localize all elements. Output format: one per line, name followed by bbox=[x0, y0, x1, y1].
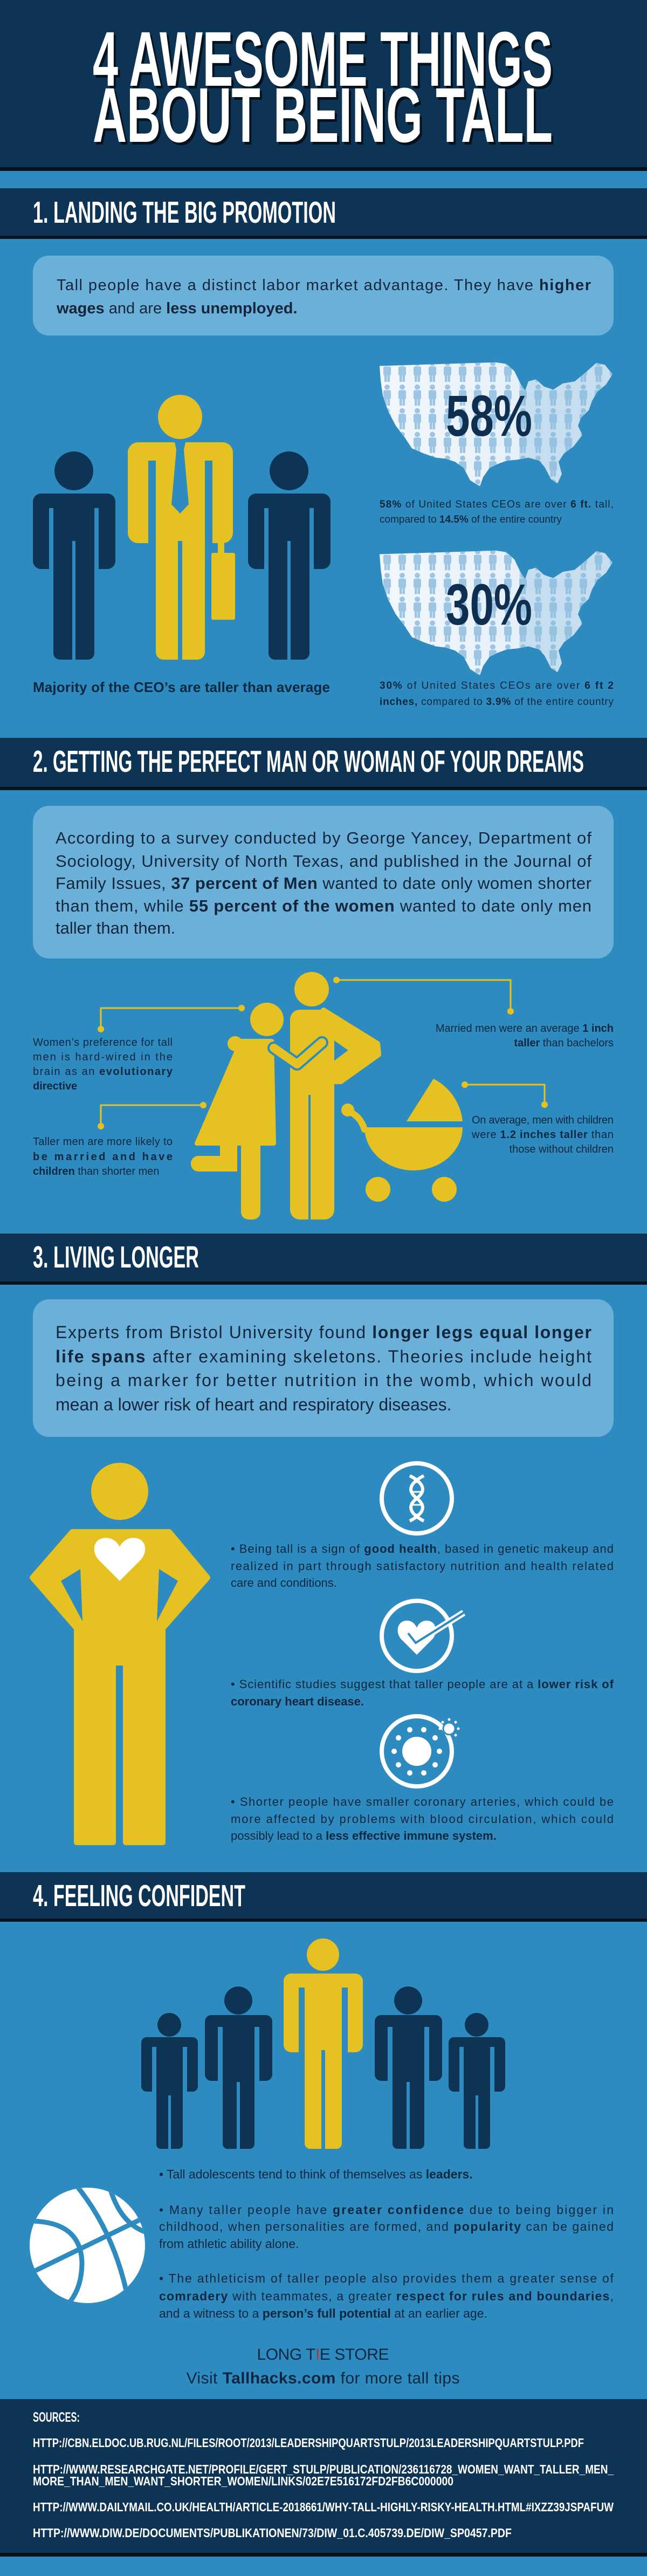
icon: basketball bbox=[30, 2184, 148, 2308]
bullet: leaders: • Tall adolescents tend to think of themselves as leaders. bbox=[159, 2167, 473, 2181]
note: women's preference: Women’s preference for tall bbox=[33, 1037, 173, 1049]
brand: Long Tie Store bbox=[187, 2346, 459, 2387]
section 1 header bbox=[0, 188, 647, 239]
note: men with children: On average, men with children bbox=[472, 1114, 614, 1126]
callout: labor market: Tall people have a distinct labor market advantage. They have higher bbox=[57, 277, 591, 294]
note: taller men married: Taller men are more likely to bbox=[33, 1136, 173, 1148]
bullet: good health bbox=[231, 1542, 614, 1590]
callout: Bristol bbox=[33, 1299, 614, 1437]
section 4 header bbox=[0, 1872, 647, 1922]
map: 58%: 58% bbox=[446, 383, 532, 448]
note: taller men married bbox=[33, 1136, 173, 1177]
note: women's preference: brain as an evolutionary bbox=[33, 1066, 173, 1078]
note: men with children bbox=[471, 1114, 614, 1155]
note: men with children: were 1.2 inches taller than bbox=[471, 1129, 614, 1141]
bullet: good health: care and conditions. bbox=[231, 1576, 337, 1590]
bullet: coronary: • Scientific studies suggest that taller people are at a lower risk of bbox=[231, 1677, 614, 1691]
sources: SOURCES: bbox=[33, 2410, 80, 2425]
bullet: good health: • Being tall is a sign of good health, based in genetic makeup and bbox=[231, 1542, 614, 1556]
brand: Long Tie Store: Visit Tallhacks.com for more tall tips bbox=[187, 2369, 459, 2387]
note: women's preference bbox=[33, 1037, 173, 1092]
section 2 header bbox=[0, 738, 647, 790]
icon: DNA bbox=[382, 1463, 452, 1533]
note: married men 1 inch: taller than bachelors bbox=[514, 1037, 614, 1049]
bullet: immune system: • Shorter people have smaller coronary arteries, which could be bbox=[231, 1795, 614, 1808]
figure 5 bbox=[449, 2013, 505, 2149]
figure 3: yellow tallest bbox=[284, 1938, 363, 2149]
section 4 header: 4. FEELING CONFIDENT bbox=[33, 1879, 245, 1913]
bullet: immune system: more affected by problems with blood circulation, which could bbox=[231, 1812, 614, 1826]
CEO figures bbox=[33, 395, 331, 660]
map: 30% bbox=[380, 551, 612, 675]
figure 4 bbox=[375, 1986, 442, 2149]
bullet: coronary bbox=[231, 1677, 614, 1708]
callout: survey: According to a survey conducted by George Yancey, Department of bbox=[56, 828, 591, 847]
map: 58% bbox=[380, 362, 612, 487]
figure: healthy person with heart bbox=[32, 1463, 208, 1842]
title band bbox=[0, 0, 647, 171]
callout: Bristol: Experts from Bristol University found longer legs equal longer bbox=[56, 1323, 591, 1342]
callout: labor market bbox=[33, 256, 614, 335]
paragraph: confidence: • Many taller people have greater confidence due to being bigger in bbox=[159, 2203, 614, 2217]
sources bbox=[0, 2399, 647, 2557]
callout: labor market: wages and are less unemployed. bbox=[56, 300, 298, 317]
section 1 header: 1. LANDING THE BIG PROMOTION bbox=[33, 195, 336, 230]
figure: left man bbox=[33, 451, 115, 660]
note: married men 1 inch: Married men were an average 1 inch bbox=[436, 1023, 614, 1034]
paragraph: confidence bbox=[159, 2203, 614, 2251]
stroller bbox=[341, 1079, 463, 1202]
paragraph: athleticism: comradery with teammates, a greater respect for rules and boundaries, bbox=[159, 2289, 614, 2303]
caption: 58%: compared to 14.5% of the entire country bbox=[380, 514, 562, 525]
caption: 30%: inches, compared to 3.9% of the entire country bbox=[380, 696, 614, 708]
callout: Bristol: mean a lower risk of heart and respiratory diseases. bbox=[56, 1395, 452, 1414]
bullet: good health: realized in part through satisfactory nutrition and health related bbox=[231, 1559, 614, 1573]
paragraph: athleticism bbox=[159, 2271, 614, 2320]
caption: 30%: 30% of United States CEOs are over 6 ft 2 bbox=[380, 680, 614, 691]
callout: survey: Sociology, University of North Texas, and published in the Journal of bbox=[56, 852, 591, 871]
bullet: coronary: coronary heart disease. bbox=[231, 1695, 364, 1708]
note: married men 1 inch bbox=[436, 1023, 614, 1049]
figure: right man bbox=[248, 451, 331, 660]
section 3 header bbox=[0, 1234, 647, 1285]
caption: 58%: 58% of United States CEOs are over 6 ft. tall, bbox=[380, 499, 614, 510]
map: 30%: 30% bbox=[446, 572, 532, 637]
caption: 30% bbox=[380, 680, 614, 708]
paragraph: athleticism: and a witness to a person’s full potential at an earlier age. bbox=[159, 2306, 487, 2320]
paragraph: athleticism: • The athleticism of taller people also provides them a greater sense of bbox=[159, 2271, 614, 2285]
sources: MORE_THAN_MEN_WANT_SHORTER_WOMEN/LINKS/02E7E516172FD2FB6C000000 bbox=[33, 2474, 453, 2488]
figure 1 bbox=[141, 2013, 198, 2149]
callout: Bristol: life spans after examining skeletons. Theories include height bbox=[56, 1347, 591, 1366]
caption: majority of CEOs: Majority of the CEO’s are taller than average bbox=[33, 679, 330, 695]
sources: HTTP://WWW.DIW.DE/DOCUMENTS/PUBLIKATIONEN/73/DIW_01.C.405739.DE/DIW_SP0457.PDF bbox=[33, 2526, 512, 2540]
paragraph: confidence: childhood, when personalities are formed, and popularity can be gained bbox=[159, 2219, 614, 2234]
brand: Long Tie Store: LONG TIE STORE bbox=[257, 2346, 389, 2363]
figure 2 bbox=[205, 1986, 272, 2149]
figure: yellow CEO bbox=[128, 395, 235, 660]
paragraph: confidence: from athletic ability alone. bbox=[159, 2237, 299, 2251]
note: women's preference: directive bbox=[33, 1080, 77, 1092]
family pictogram bbox=[191, 972, 463, 1220]
connectors bbox=[98, 977, 548, 1129]
note: men with children: those without children bbox=[510, 1143, 614, 1155]
man bbox=[290, 972, 378, 1220]
note: taller men married: be married and have bbox=[33, 1151, 173, 1163]
note: taller men married: children than shorter men bbox=[33, 1166, 160, 1177]
callout: survey: than them, while 55 percent of the women wanted to date only men bbox=[56, 896, 591, 915]
bullet: immune system: possibly lead to a less effective immune system. bbox=[231, 1829, 497, 1842]
callout: survey bbox=[33, 806, 614, 958]
callout: survey: taller than them. bbox=[56, 919, 175, 937]
section 3 header: 3. LIVING LONGER bbox=[33, 1240, 199, 1275]
icon: immune cell bbox=[382, 1716, 459, 1786]
icon: heart check bbox=[382, 1601, 464, 1671]
woman bbox=[191, 1003, 322, 1220]
note: women's preference: men is hard-wired in the bbox=[33, 1051, 173, 1063]
bullet: immune system bbox=[231, 1795, 614, 1842]
group of five people, tallest in yellow bbox=[141, 1938, 505, 2149]
caption: 58% bbox=[380, 499, 614, 525]
callout: survey: Family Issues, 37 percent of Men wanted to date only women shorter bbox=[56, 874, 591, 893]
callout: Bristol: being a marker for better nutrition in the womb, which would bbox=[56, 1371, 591, 1390]
